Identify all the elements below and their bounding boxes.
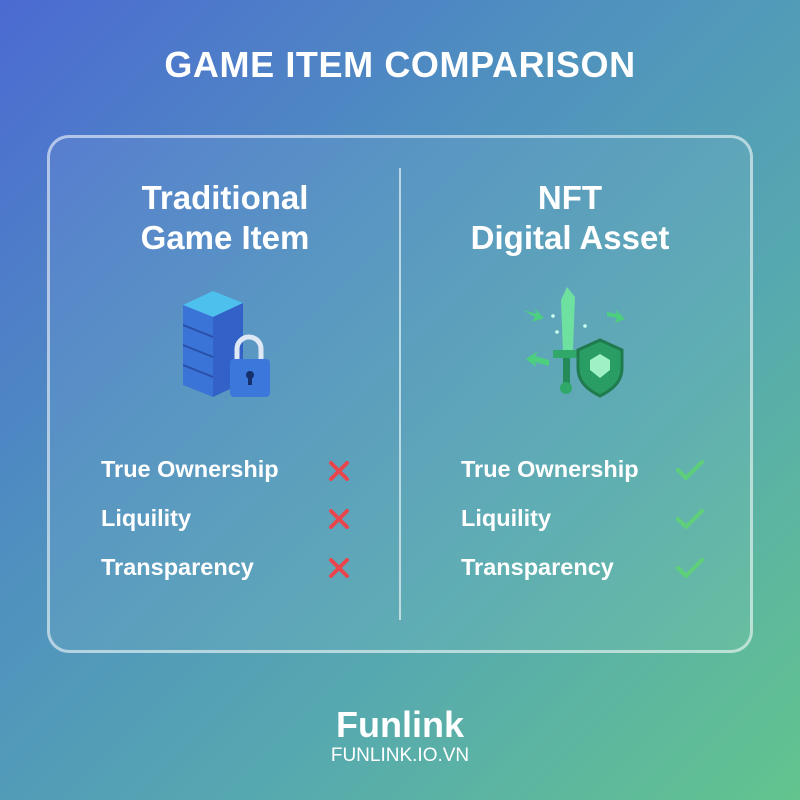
heading: nft: NFT: [538, 179, 602, 216]
heading: traditional: Game Item: [141, 219, 309, 256]
icon: server with lock: [182, 291, 270, 397]
icon: sword and shield: [523, 287, 625, 398]
row: liquility no: Liquility: [101, 505, 191, 531]
row: true ownership no: True Ownership: [101, 456, 279, 482]
logo: [331, 704, 469, 766]
row: liquility yes: Liquility: [461, 505, 551, 531]
heading: traditional: [141, 179, 309, 256]
left list: [101, 456, 350, 580]
logo: FUNLINK.IO.VN: [331, 745, 469, 766]
heading: nft: Digital Asset: [471, 219, 669, 256]
title: GAME ITEM COMPARISON: [164, 44, 636, 85]
logo: Funlink: [336, 704, 464, 745]
row: true ownership yes: True Ownership: [461, 456, 639, 482]
heading: nft: [471, 179, 669, 256]
row: transparency no: Transparency: [101, 554, 254, 580]
row: transparency yes: Transparency: [461, 554, 614, 580]
heading: traditional: Traditional: [142, 179, 308, 216]
right list: [461, 456, 704, 580]
panel: comparison: [47, 135, 753, 653]
